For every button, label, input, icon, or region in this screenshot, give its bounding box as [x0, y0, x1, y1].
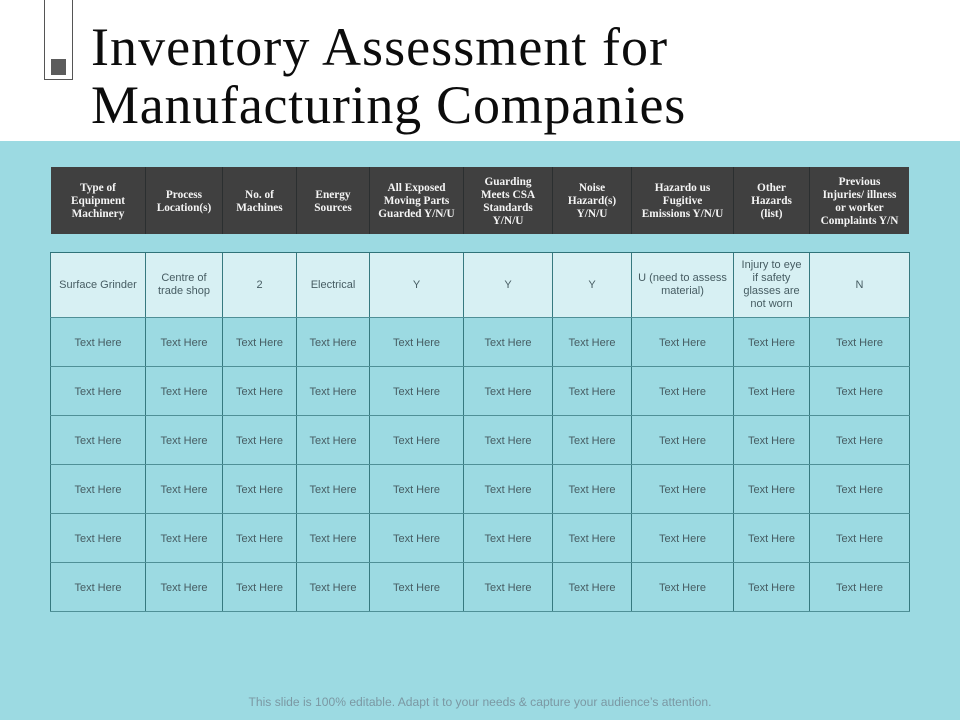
table row: surface grinder example: Centre of: [161, 272, 207, 284]
table row 7: [50, 563, 910, 612]
table header: Y/N/U: [577, 208, 607, 220]
table header: Hazard(s): [568, 195, 616, 207]
table row 4: Text Here: [236, 435, 283, 447]
title: Inventory Assessment for: [91, 17, 668, 77]
table row 2: Text Here: [309, 337, 357, 349]
table row 2: Text Here: [659, 337, 706, 349]
table row 5: Text Here: [309, 484, 357, 496]
icon: slide marker: [44, 0, 73, 80]
table row: surface grinder example: material): [661, 285, 704, 297]
table row: surface grinder example: Surface Grinder: [59, 278, 137, 290]
table header: Hazardo us: [655, 182, 710, 194]
table row 2: [50, 318, 910, 367]
table row 3: Text Here: [236, 386, 283, 398]
table header: Machinery: [72, 208, 124, 220]
table row: surface grinder example: 2: [256, 278, 263, 290]
table row 5: [50, 465, 910, 514]
table header: Fugitive: [663, 195, 702, 207]
table row 3: Text Here: [74, 386, 122, 398]
table row 5: Text Here: [836, 484, 883, 496]
table row 6: Text Here: [74, 533, 122, 545]
table row 6: Text Here: [236, 533, 283, 545]
table header: All Exposed: [387, 182, 446, 194]
table row: surface grinder example: Y: [588, 278, 596, 290]
table row 6: Text Here: [484, 533, 532, 545]
table row 7: Text Here: [484, 582, 532, 594]
table header: Hazards: [751, 195, 792, 207]
table row 4: [50, 416, 910, 465]
table row 5: Text Here: [393, 484, 440, 496]
table header: No. of: [245, 188, 274, 200]
table row 7: Text Here: [160, 582, 208, 594]
table row 2: Text Here: [568, 337, 616, 349]
table row: surface grinder example: N: [856, 278, 863, 290]
table row 5: Text Here: [74, 484, 122, 496]
title: Manufacturing Companies: [91, 75, 686, 135]
table row 3: Text Here: [836, 386, 883, 398]
table header: Location(s): [157, 202, 211, 214]
table header: Complaints Y/N: [821, 214, 898, 226]
table row 7: Text Here: [393, 582, 440, 594]
table row 5: Text Here: [748, 484, 795, 496]
title: [91, 17, 686, 135]
table header: Meets CSA: [481, 188, 535, 200]
table row: surface grinder example: Injury to eye: [742, 259, 801, 271]
table header: Moving Parts: [384, 195, 449, 207]
table row 6: Text Here: [393, 533, 440, 545]
table header: Process: [166, 188, 202, 200]
table row: surface grinder example: if safety: [753, 272, 790, 284]
table row 4: Text Here: [836, 435, 883, 447]
table row 6: Text Here: [160, 533, 208, 545]
table row 7: Text Here: [568, 582, 616, 594]
table row 6: Text Here: [748, 533, 795, 545]
table row 6: Text Here: [309, 533, 357, 545]
table row: surface grinder example: U (need to assess: [638, 272, 727, 284]
table row 2: Text Here: [748, 337, 795, 349]
table row 5: Text Here: [568, 484, 616, 496]
table header: (list): [760, 208, 782, 220]
table header: Guarded Y/N/U: [378, 208, 455, 220]
table row 4: Text Here: [74, 435, 122, 447]
table row: surface grinder example: glasses are: [743, 285, 800, 297]
table row 2: Text Here: [160, 337, 208, 349]
table header: Standards: [483, 202, 533, 214]
table row 3: Text Here: [484, 386, 532, 398]
table row 6: Text Here: [836, 533, 883, 545]
table header: [51, 167, 909, 234]
table row 5: Text Here: [160, 484, 208, 496]
table row 7: Text Here: [748, 582, 795, 594]
table row 4: Text Here: [659, 435, 706, 447]
table header: Y/N/U: [493, 214, 523, 226]
table header: Noise: [579, 182, 605, 194]
table row 2: Text Here: [393, 337, 440, 349]
table row 6: [50, 514, 910, 563]
table header: Emissions Y/N/U: [642, 208, 723, 220]
table header: Machines: [236, 202, 283, 214]
table row 4: Text Here: [160, 435, 208, 447]
footer note: This slide is 100% editable. Adapt it to your needs & capture your audience’s attention.: [248, 695, 712, 709]
table row 3: [50, 367, 910, 416]
table row 3: Text Here: [309, 386, 357, 398]
table row 2: Text Here: [836, 337, 883, 349]
table row 4: Text Here: [393, 435, 440, 447]
table row: surface grinder example: [50, 252, 910, 318]
table row 4: Text Here: [748, 435, 795, 447]
table row 7: Text Here: [659, 582, 706, 594]
table row: surface grinder example: Y: [504, 278, 512, 290]
table row 5: Text Here: [659, 484, 706, 496]
table row 3: Text Here: [393, 386, 440, 398]
table header: Energy: [315, 188, 351, 200]
table row: surface grinder example: Electrical: [311, 278, 355, 290]
table row 7: Text Here: [309, 582, 357, 594]
table row 2: Text Here: [484, 337, 532, 349]
table row 4: Text Here: [568, 435, 616, 447]
title band: [0, 0, 960, 141]
table header: Sources: [314, 202, 352, 214]
table row 2: Text Here: [236, 337, 283, 349]
table header: Equipment: [71, 195, 125, 207]
table header: Guarding: [484, 176, 532, 188]
table row 6: Text Here: [568, 533, 616, 545]
table header: Previous: [839, 176, 880, 188]
table row 5: Text Here: [236, 484, 283, 496]
table row: surface grinder example: not worn: [750, 298, 793, 310]
table header: Injuries/ illness: [823, 188, 896, 200]
table row 7: Text Here: [74, 582, 122, 594]
table row 4: Text Here: [309, 435, 357, 447]
table row: surface grinder example: Y: [413, 278, 420, 290]
table header: or worker: [835, 202, 884, 214]
table row 5: Text Here: [484, 484, 532, 496]
table row 7: Text Here: [236, 582, 283, 594]
table row 3: Text Here: [659, 386, 706, 398]
table row: surface grinder example: trade shop: [158, 285, 210, 297]
table row 3: Text Here: [160, 386, 208, 398]
table header: Type of: [80, 182, 116, 194]
table row 4: Text Here: [484, 435, 532, 447]
table row 2: Text Here: [74, 337, 122, 349]
table row 6: Text Here: [659, 533, 706, 545]
table row 3: Text Here: [568, 386, 616, 398]
table row 7: Text Here: [836, 582, 883, 594]
table header: Other: [757, 182, 786, 194]
table row 3: Text Here: [748, 386, 795, 398]
